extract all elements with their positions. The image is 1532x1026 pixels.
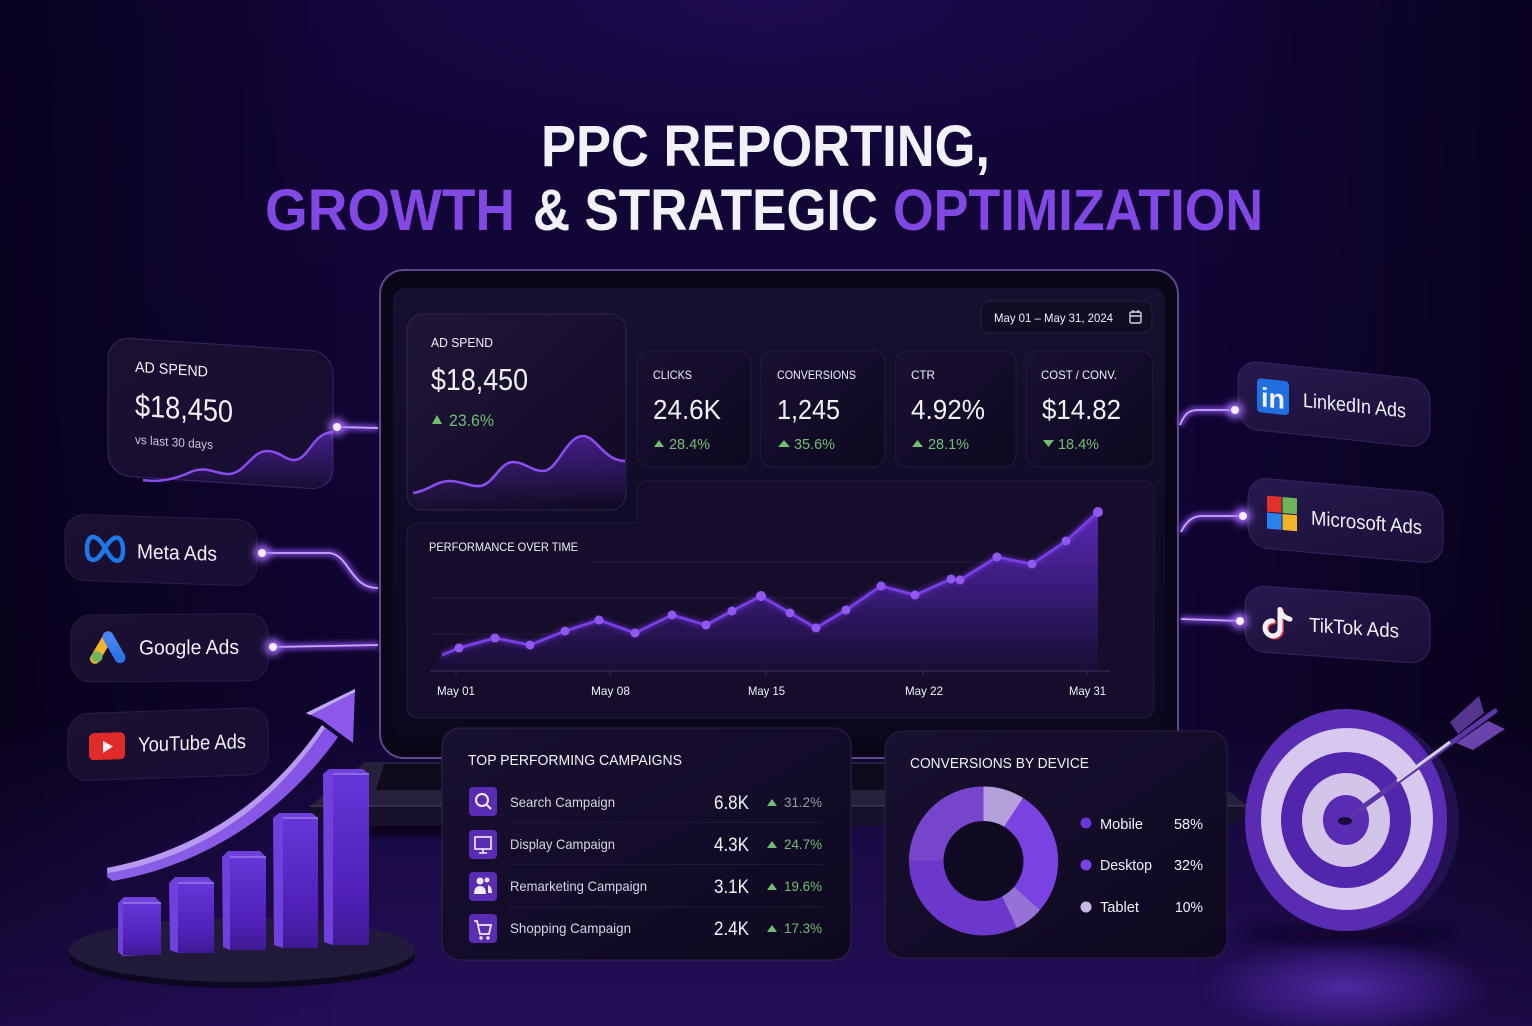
card: conversions: 35.6% [794, 436, 835, 453]
panel: performance over time: May 15 [748, 684, 785, 698]
panel: top performing campaigns [442, 728, 851, 960]
card: cost per conversion [1026, 351, 1153, 467]
growth arrow [107, 689, 355, 881]
panel: performance over time: May 01 [437, 684, 475, 698]
icon: youtube [89, 732, 125, 760]
card: conversions: 1,245 [777, 394, 840, 425]
card: conversions: CONVERSIONS [777, 368, 856, 382]
icon: meta [87, 537, 123, 561]
arrow shaft and fins [1338, 696, 1505, 825]
panel: conversions by device: CONVERSIONS BY DEVICE [910, 755, 1089, 772]
card: clicks [637, 351, 751, 467]
panel: top performing campaigns: TOP PERFORMING CAMPAIGNS [468, 752, 682, 769]
card: youtube ads [68, 707, 268, 781]
card: ad spend: AD SPEND [431, 335, 493, 350]
row: search campaign: Search Campaign [510, 794, 615, 810]
card: linkedin ads [1238, 360, 1430, 448]
target with arrow [1240, 696, 1505, 940]
icon: linkedin [1257, 378, 1289, 415]
card: ad spend: 23.6% [449, 411, 494, 430]
card: ctr: CTR [911, 368, 935, 382]
card: tiktok ads: TikTok Ads [1309, 614, 1399, 643]
date range selector: May 01 – May 31, 2024 [994, 311, 1113, 325]
row: remarketing campaign: 3.1K [714, 877, 749, 898]
legend: Desktop [1100, 857, 1152, 874]
legend: Tablet [1100, 899, 1140, 916]
floating card: ad spend: AD SPEND [135, 359, 208, 381]
legend: Mobile [1100, 816, 1143, 833]
icon: search [476, 794, 491, 809]
bars [118, 769, 369, 956]
row: shopping campaign: Shopping Campaign [510, 920, 631, 936]
icon: microsoft [1267, 496, 1297, 531]
card: ad spend: $18,450 [431, 362, 528, 397]
card: ctr: 4.92% [911, 394, 985, 425]
row: shopping campaign [469, 914, 822, 943]
panel: performance over time: May 08 [591, 684, 630, 698]
card: ad spend [407, 314, 626, 510]
card: clicks: CLICKS [653, 368, 692, 382]
floating card: ad spend: $18,450 [135, 388, 233, 429]
icon: tiktok [1265, 608, 1290, 638]
card: meta ads: Meta Ads [137, 540, 217, 566]
card: clicks: 28.4% [669, 436, 710, 453]
card: linkedin ads: LinkedIn Ads [1303, 390, 1406, 423]
laptop base [310, 762, 1248, 836]
row: search campaign [469, 787, 822, 816]
row: search campaign: 31.2% [784, 794, 822, 810]
card: conversions [761, 351, 885, 467]
icon: calendar [1130, 310, 1141, 323]
sparkline [413, 436, 625, 493]
floating card: ad spend: vs last 30 days [135, 433, 213, 452]
panel: performance over time [407, 481, 1154, 718]
platform [69, 918, 415, 988]
row: display campaign: 24.7% [784, 836, 822, 852]
growth bar chart with platform [69, 689, 415, 988]
glow dots [254, 402, 1251, 655]
title: GROWTH [265, 178, 515, 243]
legend: 10% [1175, 899, 1203, 916]
card: microsoft ads [1248, 477, 1443, 564]
connector lines [262, 410, 1243, 647]
row: remarketing campaign: 19.6% [784, 878, 822, 894]
card: google ads [71, 614, 268, 682]
icon: monitor [475, 837, 491, 853]
row: display campaign [469, 830, 822, 859]
card: microsoft ads: Microsoft Ads [1311, 508, 1422, 539]
card: cost per conversion: COST / CONV. [1041, 368, 1117, 382]
donut chart [909, 786, 1058, 928]
card: clicks: 24.6K [653, 394, 721, 425]
line chart [430, 507, 1110, 676]
floating card: ad spend [108, 337, 333, 490]
row: search campaign: 6.8K [714, 793, 749, 814]
row: shopping campaign: 17.3% [784, 920, 822, 936]
legend: 32% [1174, 857, 1203, 874]
icon: linkedin: in [1261, 381, 1285, 415]
panel: performance over time: May 22 [905, 684, 943, 698]
icon: cart [474, 921, 491, 940]
floating card sparkline [143, 432, 333, 488]
card: meta ads [65, 514, 257, 586]
row: remarketing campaign: Remarketing Campaign [510, 878, 647, 894]
card: google ads: Google Ads [139, 636, 239, 660]
legend: 58% [1174, 816, 1203, 833]
icon: people [474, 878, 492, 894]
card: cost per conversion: 18.4% [1058, 436, 1099, 453]
title: OPTIMIZATION [893, 178, 1263, 243]
title: & STRATEGIC [533, 178, 878, 243]
icon: google ads [92, 637, 120, 662]
row: remarketing campaign [469, 872, 822, 901]
title [265, 114, 1263, 243]
row: display campaign: 4.3K [714, 835, 749, 856]
title: PPC REPORTING, [541, 114, 990, 179]
card: ctr: 28.1% [928, 436, 969, 453]
panel: performance over time: May 31 [1069, 684, 1106, 698]
card: cost per conversion: $14.82 [1042, 394, 1121, 425]
panel: performance over time: PERFORMANCE OVER TIME [429, 540, 578, 554]
row: display campaign: Display Campaign [510, 836, 615, 852]
card: ctr [895, 351, 1016, 467]
laptop screen [380, 270, 1178, 758]
panel: conversions by device [885, 731, 1227, 958]
date range selector [981, 301, 1152, 333]
legend [1080, 816, 1203, 916]
row: shopping campaign: 2.4K [714, 919, 749, 940]
card: youtube ads: YouTube Ads [138, 730, 246, 757]
card: tiktok ads [1245, 585, 1430, 664]
